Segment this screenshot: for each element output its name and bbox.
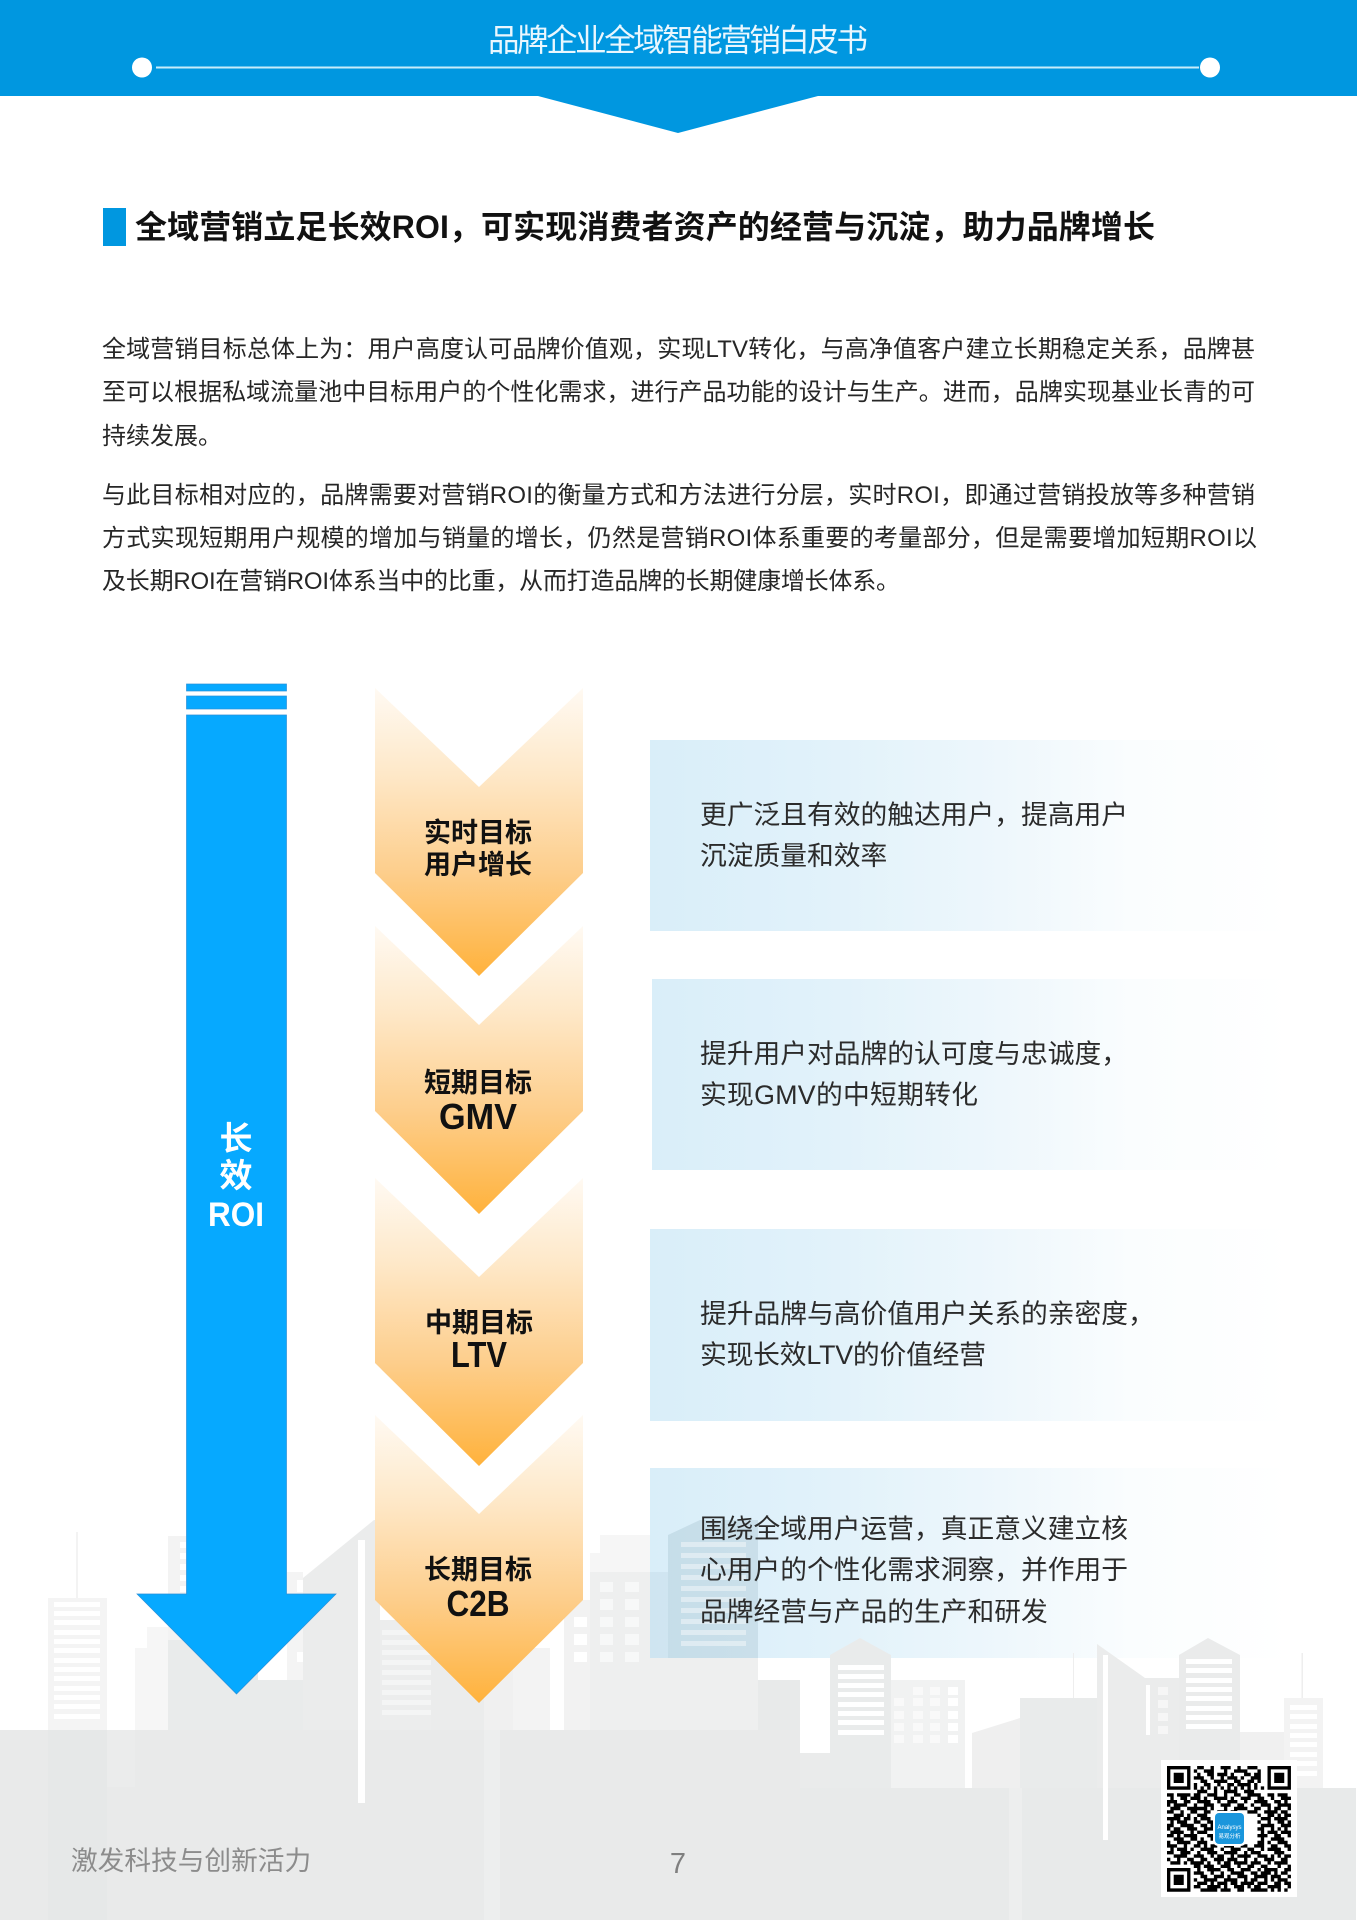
arrow label (208, 1120, 264, 1234)
arrow shaft and head (137, 715, 336, 1694)
chevron: short-term goal: 短期目标 (424, 1068, 532, 1098)
chevron: long-term goal: 长期目标 (424, 1555, 532, 1585)
intro paragraph 2: 及长期ROI在营销ROI体系当中的比重，从而打造品牌的长期健康增长体系。 (102, 568, 900, 595)
panel text: long-term (700, 1514, 1128, 1627)
panel text: mid-term (700, 1299, 1155, 1370)
panel text: short-term (700, 1039, 1128, 1110)
chevron: short-term goal: GMV (439, 1096, 517, 1137)
intro paragraph 2: 方式实现短期用户规模的增加与销量的增长，仍然是营销ROI体系重要的考量部分，但是需要增加短期ROI以 (102, 525, 1257, 552)
chevron: mid-term goal (375, 1178, 583, 1466)
long-term ROI arrow (137, 684, 336, 1694)
arrow label: 长 (220, 1120, 252, 1157)
city skyline background (0, 1520, 1356, 1920)
QR centre logo: 易观分析 (1218, 1832, 1241, 1840)
chevron: realtime goal: 实时目标 (424, 818, 532, 848)
panel text: realtime: 更广泛且有效的触达用户，提高用户 (700, 800, 1128, 830)
intro paragraph 1: 至可以根据私域流量池中目标用户的个性化需求，进行产品功能的设计与生产。进而，品牌实现基业长青的可 (102, 379, 1255, 406)
footer slogan: 激发科技与创新活力 (71, 1846, 311, 1876)
intro paragraph 1 (102, 336, 1255, 450)
arrow top stripes (186, 684, 286, 709)
chevron: short-term goal (375, 926, 583, 1214)
panel text: long-term: 围绕全域用户运营，真正意义建立核 (700, 1514, 1128, 1544)
intro paragraph 2: 与此目标相对应的，品牌需要对营销ROI的衡量方式和方法进行分层，实时ROI，即通过营销投放等多种营销 (102, 482, 1255, 509)
panel text: realtime: 沉淀质量和效率 (700, 841, 887, 871)
chevron: realtime goal (375, 688, 583, 976)
header title: 品牌企业全域智能营销白皮书 (488, 22, 868, 58)
chevron: long-term goal: C2B (446, 1583, 510, 1624)
intro paragraph 1: 全域营销目标总体上为：用户高度认可品牌价值观，实现LTV转化，与高净值客户建立长期稳定关系，品牌甚 (102, 336, 1255, 363)
panel text: short-term: 实现GMV的中短期转化 (700, 1080, 978, 1110)
chevron: mid-term goal: LTV (451, 1334, 507, 1375)
section heading: 全域营销立足长效ROI，可实现消费者资产的经营与沉淀，助力品牌增长 (135, 209, 1155, 245)
description panels background (650, 740, 1290, 1658)
chevron: realtime goal: 用户增长 (424, 850, 532, 880)
panel text: realtime (700, 800, 1128, 871)
panel text: long-term: 心用户的个性化需求洞察，并作用于 (700, 1555, 1128, 1585)
panel text: short-term: 提升用户对品牌的认可度与忠诚度， (700, 1039, 1128, 1069)
panel text: mid-term: 提升品牌与高价值用户关系的亲密度， (700, 1299, 1155, 1329)
chevron: long-term goal (375, 1415, 583, 1703)
chevron: mid-term goal: 中期目标 (425, 1308, 533, 1338)
arrow label: ROI (208, 1196, 264, 1234)
panel text: long-term: 品牌经营与产品的生产和研发 (700, 1597, 1048, 1627)
arrow label: 效 (220, 1157, 252, 1194)
QR centre logo: Analysys (1217, 1825, 1242, 1831)
intro paragraph 1: 持续发展。 (102, 423, 222, 450)
header band (0, 0, 1357, 133)
page number: 7 (670, 1848, 686, 1880)
QR centre logo (1213, 1811, 1246, 1846)
panel text: mid-term: 实现长效LTV的价值经营 (700, 1340, 986, 1370)
intro paragraph 2 (102, 482, 1257, 595)
QR code (1161, 1760, 1297, 1897)
